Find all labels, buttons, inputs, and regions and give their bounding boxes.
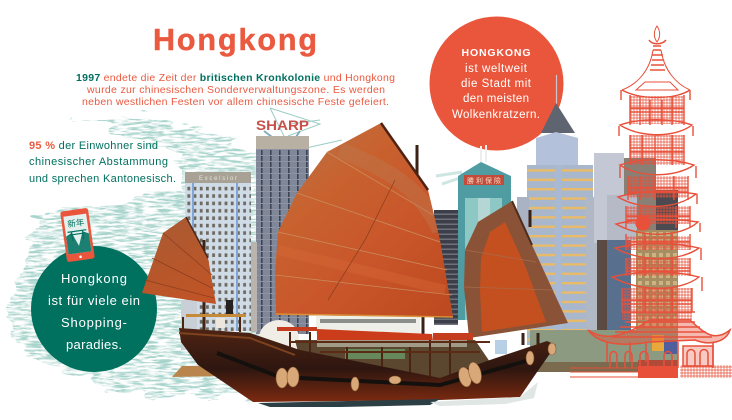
pagoda tiers	[612, 90, 702, 312]
intro paragraph: 1997 endete die Zeit der britischen Kronkolonie und Hongkong	[76, 72, 395, 84]
callout: skyscrapers: Wolkenkratzern.	[452, 109, 540, 121]
callout: shopping: Hongkong	[61, 271, 127, 286]
building: tan residential tower	[636, 230, 678, 330]
sail: rear	[142, 217, 216, 304]
callout: shopping: paradies.	[66, 337, 122, 352]
cabin and canopy	[183, 300, 507, 382]
population fact: chinesischer Abstammung	[29, 156, 168, 168]
population fact: und sprechen Kantonesisch.	[29, 173, 176, 185]
building: dark glass block	[597, 158, 678, 340]
pagoda hatched body	[622, 96, 692, 320]
pagoda base	[607, 342, 713, 368]
intro paragraph	[76, 72, 395, 108]
callout: shopping: Shopping-	[61, 315, 127, 330]
building: teal bank tower: 勝利保險	[467, 176, 501, 186]
intro paragraph: neben westlichen Festen vor allem chinesische Feste gefeiert.	[82, 96, 389, 108]
harbour ground patch	[172, 366, 228, 377]
pagoda spire	[622, 26, 690, 90]
pagoda wall	[570, 365, 732, 378]
population fact	[29, 140, 176, 185]
building: pale grey block	[594, 153, 624, 243]
icon: smartphone: 新年	[67, 216, 86, 230]
icon: smartphone	[60, 208, 95, 262]
title: Hongkong	[153, 23, 317, 57]
waterfront strip	[530, 330, 678, 378]
callout: skyscrapers	[430, 16, 564, 150]
callout: shopping: ist für viele ein	[48, 293, 140, 308]
fenders	[276, 343, 556, 391]
callout: skyscrapers: den meisten	[463, 93, 529, 105]
building: Sharp tower	[256, 117, 309, 334]
junk boat	[142, 123, 568, 407]
building: Sharp tower: SHARP	[256, 117, 309, 133]
sail: main	[275, 123, 453, 317]
population fact: 95 % der Einwohner sind	[29, 140, 158, 152]
callout: skyscrapers: die Stadt mit	[461, 78, 532, 90]
engraved teal wave background	[10, 115, 262, 398]
callout: skyscrapers: ist weltweit	[465, 63, 528, 75]
callout: shopping	[31, 246, 157, 372]
water wake	[258, 382, 538, 407]
building: Excelsior hotel: Excelsior	[199, 176, 237, 182]
intro paragraph: wurde zur chinesischen Sonderverwaltungszone. Es werden	[86, 84, 385, 96]
pagoda line drawing	[570, 26, 732, 378]
pagoda main roof	[588, 320, 730, 344]
skyline photo	[172, 75, 678, 378]
callout: skyscrapers: HONGKONG	[462, 47, 530, 59]
building: striped main skyscraper	[517, 75, 598, 345]
building: dark office block	[434, 210, 458, 325]
engraved teal rigging behind skyline	[270, 108, 462, 184]
hull	[179, 328, 556, 402]
sail: front	[464, 201, 568, 338]
mast and rigging	[204, 145, 538, 356]
building: Excelsior hotel	[181, 172, 257, 350]
building: teal bank tower	[458, 145, 511, 320]
dome and white building	[259, 316, 420, 356]
